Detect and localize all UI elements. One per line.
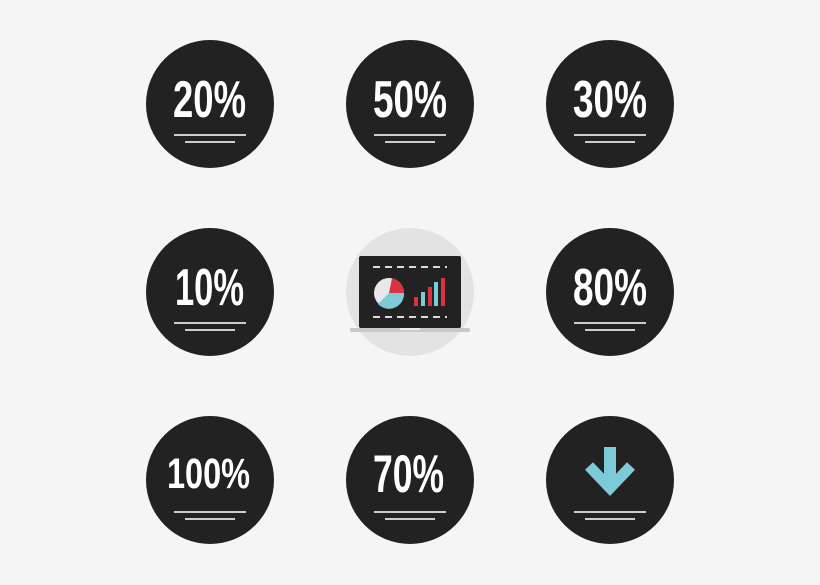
badge: 10% [146, 228, 274, 356]
badge: 70% [346, 416, 474, 544]
badge: 10%: 10% [175, 259, 244, 317]
badge: 80% [546, 228, 674, 356]
badge: 50%: 50% [373, 71, 447, 129]
badge: 30%: 30% [573, 71, 647, 129]
icon: laptop with charts [346, 228, 474, 356]
badge: 20% [146, 40, 274, 168]
badge: 20%: 20% [173, 71, 246, 129]
badge: 100%: 100% [167, 450, 250, 498]
badge: 70%: 70% [373, 445, 444, 504]
badge: 50% [346, 40, 474, 168]
badge: download arrow [546, 416, 674, 544]
badge: 30% [546, 40, 674, 168]
badge: 100% [146, 416, 274, 544]
badge: 80%: 80% [573, 259, 647, 317]
